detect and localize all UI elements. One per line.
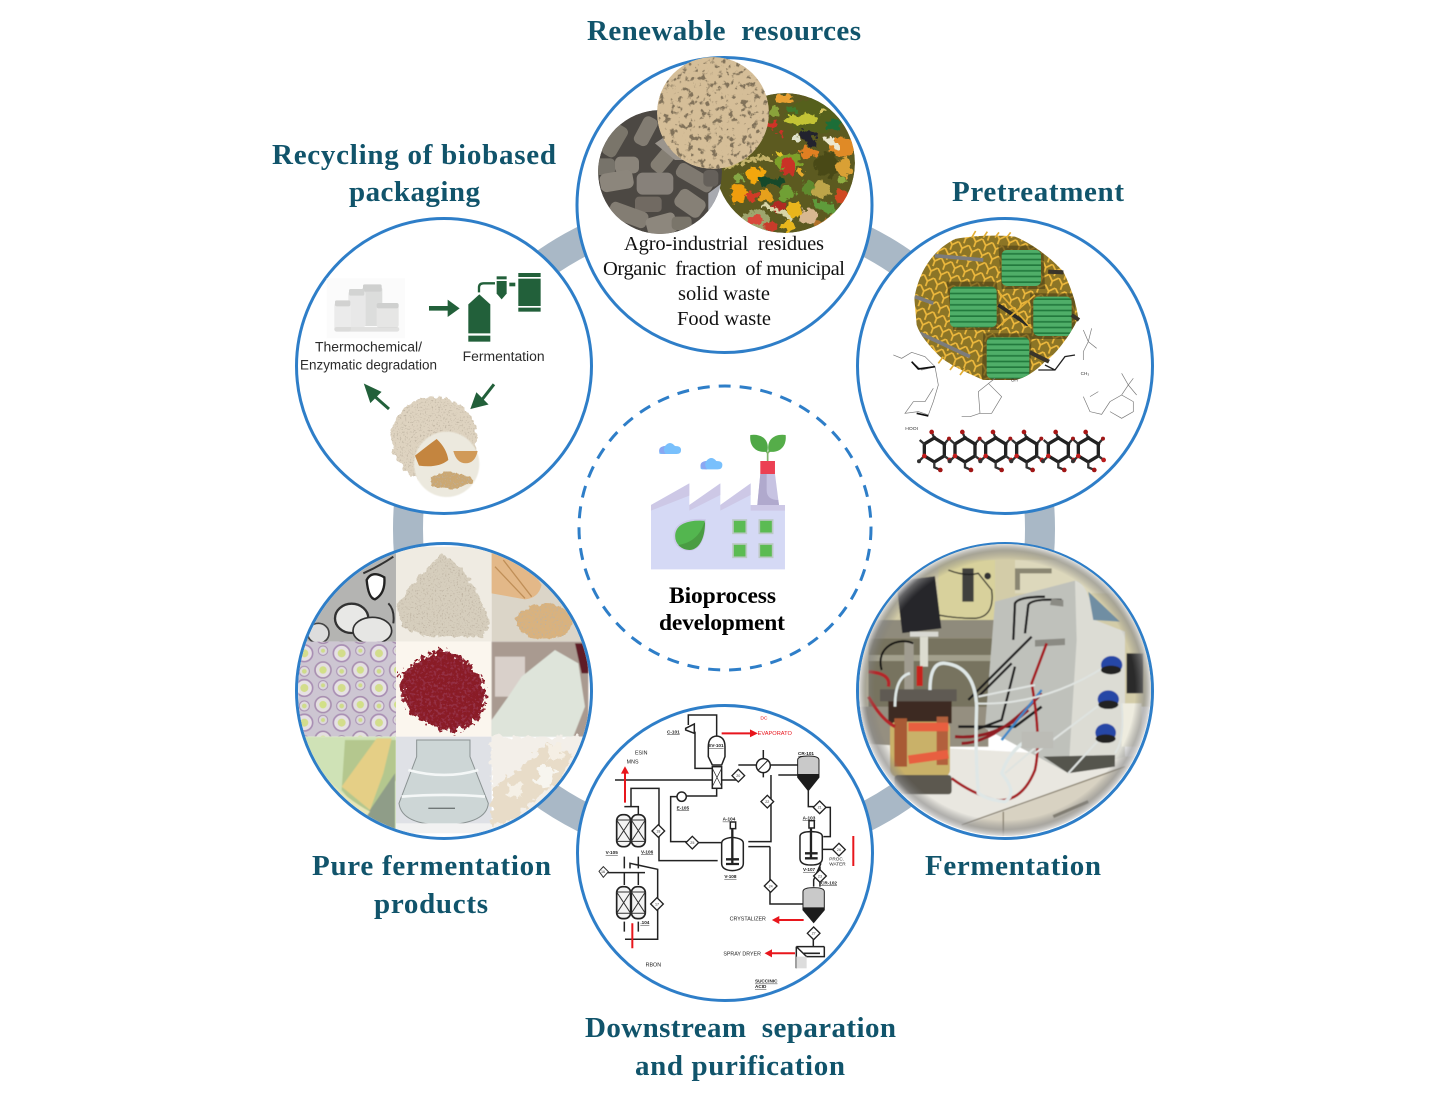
heading: downstream separation: Downstream separation xyxy=(585,1012,896,1044)
photo: pellets xyxy=(595,110,722,239)
arrow: to fermentation xyxy=(429,300,460,317)
process flow diagram: V-108 xyxy=(724,874,737,879)
arrow: to degradation xyxy=(366,386,389,409)
panel: pretreatment xyxy=(858,218,1152,514)
heading: pure fermentation products: products xyxy=(374,888,488,920)
tile: cup and granules xyxy=(492,553,582,642)
heading: pretreatment: Pretreatment xyxy=(952,176,1124,208)
molecule: lignin structure: CH₃ xyxy=(1081,371,1089,376)
tile: clear liquid flask xyxy=(396,737,492,833)
icon: white bottles xyxy=(327,278,405,338)
process flow diagram: WATER xyxy=(829,862,846,867)
process flow diagram: V-107 xyxy=(803,867,816,872)
label: degradation: Thermochemical/ xyxy=(315,340,422,355)
process flow diagram: 18 xyxy=(656,829,660,833)
process flow diagram: MNS xyxy=(627,759,639,765)
photo: bioplastic pellets and cups xyxy=(392,396,479,497)
process flow diagram xyxy=(599,715,853,989)
photo: food waste xyxy=(715,93,855,233)
molecule: lignin structure: OH xyxy=(1011,378,1018,383)
tile: white flakes xyxy=(492,737,588,832)
tile: cell rings xyxy=(298,642,396,737)
label: degradation xyxy=(300,340,437,372)
icon: green factory xyxy=(651,435,786,569)
process flow diagram: DC xyxy=(760,715,768,721)
heading: recycling: packaging xyxy=(349,176,480,208)
label: centre text: development xyxy=(659,610,785,636)
process flow diagram: 16 xyxy=(601,870,605,874)
process flow diagram: A-104 xyxy=(723,817,736,822)
tile: red biomass xyxy=(396,642,492,737)
process flow diagram: 20 xyxy=(736,774,740,778)
process flow diagram: A-103 xyxy=(803,815,816,820)
process flow diagram: EVAPORATO xyxy=(758,731,793,737)
arrow: to bioplastic xyxy=(473,384,494,407)
heading: recycling: Recycling of biobased xyxy=(272,139,556,171)
panel: renewable resources xyxy=(577,57,872,352)
process flow diagram: V-105 xyxy=(606,850,618,855)
molecule: lignin structure xyxy=(893,328,1137,432)
heading: fermentation: Fermentation xyxy=(925,850,1101,882)
tile: granules micrograph xyxy=(306,553,396,642)
process flow diagram: .104 xyxy=(640,920,650,925)
heading: renewable resources: Renewable resources xyxy=(587,15,861,47)
label: fermentation: Fermentation xyxy=(463,349,545,364)
tile: white polymer in flask xyxy=(492,642,588,737)
process flow diagram: 23 xyxy=(818,874,822,878)
process flow diagram: 26 xyxy=(837,848,841,852)
tile: off-white powder xyxy=(396,547,492,642)
molecule: lignin structure: HOOI xyxy=(905,426,918,432)
process flow diagram: PROC. xyxy=(829,857,844,862)
process flow diagram: 24 xyxy=(769,884,773,888)
process flow diagram: EV-101 xyxy=(708,743,724,748)
red stream arrows xyxy=(623,731,853,956)
process flow diagram: 25 xyxy=(690,841,694,845)
process flow diagram: V-106 xyxy=(641,849,654,854)
tile: yellow film xyxy=(298,737,396,832)
process flow diagram: E-105 xyxy=(677,805,689,810)
panel: fermentation photo xyxy=(855,540,1155,840)
icon: green fermentation tanks xyxy=(468,273,541,342)
diamonds xyxy=(599,769,845,940)
text: resource list: solid waste xyxy=(678,283,770,305)
label: centre text xyxy=(659,583,785,636)
heading: recycling xyxy=(272,139,556,208)
process flow diagram: CR-102 xyxy=(821,880,837,885)
molecule: ball and stick cellulose chain xyxy=(917,430,1106,472)
process flow diagram: RBON xyxy=(646,963,661,969)
photo: wood chips xyxy=(657,57,769,169)
panel: bioprocess development centre xyxy=(579,386,871,670)
label: degradation: Enzymatic degradation xyxy=(300,357,437,372)
text: resource list xyxy=(603,233,845,330)
panel: pure fermentation products xyxy=(296,543,592,838)
heading: downstream separation xyxy=(585,1012,896,1082)
process flow diagram: 22 xyxy=(765,800,769,804)
heading: pure fermentation products xyxy=(312,850,551,920)
text: resource list: Organic fraction of municipal xyxy=(603,258,845,280)
process flow diagram: 21 xyxy=(818,806,822,810)
process flow diagram: ACID xyxy=(755,984,767,989)
panel: downstream separation xyxy=(578,706,872,1000)
process flow diagram: 17 xyxy=(655,902,659,906)
icon: cellulose microfibrils xyxy=(912,231,1082,382)
panel: recycling of biobased packaging xyxy=(296,218,592,514)
process flow diagram: CR-101 xyxy=(798,751,814,756)
process flow diagram: SPRAY DRYER xyxy=(723,951,761,957)
text: resource list: Agro-industrial residues xyxy=(624,233,824,255)
heading: pure fermentation products: Pure fermentation xyxy=(312,850,551,882)
process flow diagram: ESIN xyxy=(635,751,648,757)
process flow diagram: 27 xyxy=(812,932,816,936)
label: centre text: Bioprocess xyxy=(669,583,776,609)
process flow diagram: C-101 xyxy=(667,729,680,734)
process flow diagram: CRYSTALIZER xyxy=(730,917,766,923)
text: resource list: Food waste xyxy=(677,308,771,330)
connector ring xyxy=(408,207,1040,851)
heading: downstream separation: and purification xyxy=(635,1050,845,1082)
process flow diagram: SUCCINIC xyxy=(755,979,778,984)
